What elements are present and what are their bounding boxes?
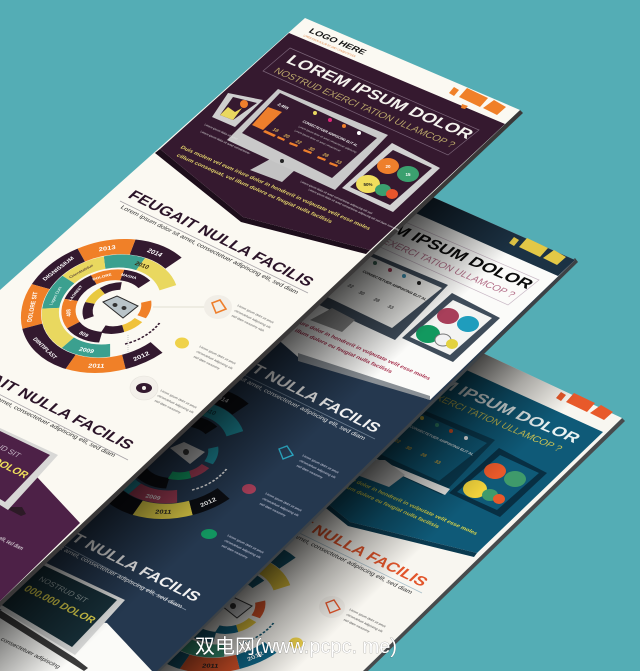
card 2 title frame (323, 198, 539, 305)
heading subtitle: Lorem ipsum dolor sit amet, consectetuer adipiscing elit, sed diam (119, 205, 300, 296)
monitor screen (242, 93, 377, 178)
card 2 icon note: consectetuer adipiscing elit (298, 459, 337, 479)
lightbulb note: consectetuer adipiscing elit (195, 350, 234, 370)
card 3 monitor values (382, 432, 442, 466)
card 2 crimson paragraph: cillum consequat, vel illum dolore eu feugiat nulla facilisis (235, 303, 393, 375)
card 1: purple and cream poster (0, 18, 523, 607)
book note: consectetuer adipiscing elit (233, 309, 272, 329)
bar values: 20 (282, 133, 291, 140)
card 2 monitor values: 22 (346, 283, 355, 290)
icon: eye (130, 376, 158, 400)
card 3 monitor frame (334, 394, 495, 495)
card 2 eye note: consectetuer adipiscing elit (223, 539, 262, 559)
card 3 monitor values: 30 (404, 445, 413, 452)
eye note (153, 389, 198, 414)
card 2 heart note: sed diam nonummy (258, 502, 287, 517)
small captions: Lorem ipsum dolor sit amet consectetuer (199, 130, 251, 155)
tablet screen (350, 150, 432, 205)
card 3 dotted arc (161, 558, 301, 658)
book note: Lorem ipsum dolor sit amet (236, 304, 275, 324)
card 3 monitor values: 33 (433, 459, 442, 466)
donut centre icon (103, 296, 138, 318)
yellow paragraph: Duis molem vel eum iriure dolor in hendrerit in vulputate velit esse moles (179, 145, 371, 231)
card 2: navy and white poster (0, 165, 578, 671)
small captions (199, 123, 401, 232)
card 2 tablet circles (416, 308, 479, 349)
title frame (263, 48, 479, 155)
card 3 monitor heading: CONSECTETUER ADIPISCING ELIT AL (408, 425, 475, 457)
card 3 yellow paragraph: Duis molem vel eum iriure dolor in hendrerit in vulputate velit esse moles (286, 450, 478, 536)
logo: LOGO HERE (307, 26, 369, 56)
card 2 eye note (220, 534, 265, 559)
card 2 top band (343, 165, 575, 276)
card 2 legend (373, 261, 421, 285)
card 2 cast shadow on card 3 (150, 320, 622, 671)
card 3 donut chart (114, 526, 335, 671)
device icons (449, 87, 506, 115)
card 2 subtitle: NOSTRUD EXERCI TATION ULLAMCOP ? (331, 216, 518, 300)
card 3 book note (342, 608, 387, 633)
card 2 second rule (8, 516, 186, 610)
card 2 monitor values: 20 (335, 277, 344, 284)
card 3 inner arcs (190, 579, 272, 637)
laptop amount: 000.000 DOLOR (21, 584, 98, 626)
card 3 tablet screen (457, 455, 539, 510)
card 3 monitor values: 20 (382, 432, 391, 439)
card 3 monitor values: 28 (419, 452, 428, 459)
tablet values: 15 (405, 172, 411, 177)
donut chart: 408 (66, 308, 73, 317)
card 3 icon: book (319, 596, 345, 618)
connector line 2 (127, 335, 129, 352)
icon: book (204, 295, 232, 319)
laptop base (0, 505, 26, 516)
card 3 lower contents (114, 488, 431, 671)
card 3 donut centre icon (217, 596, 252, 618)
card 2 navy page (0, 165, 575, 671)
card 3: blue and cream poster (114, 320, 625, 671)
card 2 monitor heading: CONSECTETUER ADIPISCING ELIT AL (361, 270, 428, 302)
card 2 icon: book (279, 446, 293, 459)
card 2 donut chart: 2009 (144, 493, 162, 502)
card 2 donut chart: 2010 (200, 407, 218, 417)
card 2 title: LOREM IPSUM DOLOR (342, 203, 537, 292)
card 3 thickness edge (360, 418, 625, 671)
card 2 icon note (295, 454, 340, 479)
laptop frame (0, 428, 58, 510)
watermark: 双电网(www.pcpc. me) (195, 635, 397, 658)
card 3 top contents (282, 357, 613, 536)
card 3 donut chart: 2011 (201, 663, 219, 669)
donut chart: 2009 (77, 346, 96, 355)
laptop label: NOSTRUD SIT (37, 575, 90, 604)
card 2 icon: heart (242, 484, 256, 494)
card 2 lower contents (67, 334, 384, 559)
card 2 donut chart (67, 372, 288, 531)
card 3 yellow paragraph: cillum consequat, vel illum dolore eu feugiat nulla facilisis (282, 458, 440, 530)
donut chart: 2010 (133, 261, 151, 271)
card 3 legend (420, 416, 468, 440)
card 3 chevron fold (264, 454, 477, 557)
card 3 monitor stand (357, 460, 405, 487)
laptop screen (0, 565, 117, 647)
card 2 icon note: sed diam nonummy (295, 464, 324, 479)
card 3 heading subtitle: Lorem ipsum dolor sit amet, consectetuer adipiscing elit, sed diam (233, 505, 414, 596)
bar value: 2,455 (276, 102, 291, 110)
card 3 monitor bottom strip (347, 451, 450, 495)
donut chart: 2011 (87, 363, 105, 369)
donut chart: MAGNA (120, 272, 138, 280)
laptop base (0, 610, 88, 671)
card 2 heart note: Lorem ipsum dolor sit amet (264, 492, 303, 512)
card 2 fold (298, 353, 430, 400)
donut chart: 2012 (132, 351, 151, 363)
card 3 device icons (556, 392, 613, 420)
card 3 book note: Lorem ipsum dolor sit amet (348, 608, 387, 628)
donut chart: DOLORE (92, 272, 112, 281)
card 2 donut chart: 2012 (199, 497, 218, 509)
lower purple section (0, 440, 80, 601)
monitor copy: Lorem ipsum dolor sit amet consectetuer adipiscing (297, 125, 358, 154)
donut chart: LAOREET (67, 284, 84, 301)
card 2 donut chart: 2011 (154, 509, 172, 515)
donut chart: Orientibitidue (68, 263, 95, 279)
monitor heading: CONSECTETUER ADIPISCING ELIT AL (301, 120, 359, 148)
tablet frame (342, 143, 440, 212)
phone (212, 93, 263, 127)
card 1 purple header (160, 33, 505, 250)
card 2 laptop (0, 560, 125, 671)
connector line (153, 306, 208, 308)
card 3 tablet circles (463, 463, 526, 504)
card 3 blue header (267, 338, 603, 553)
tablet values: 50% (363, 182, 373, 187)
eye note: sed diam nonummy (153, 399, 182, 414)
card 2 donut chart: 2014 (213, 394, 231, 405)
card 2 second heading: FEUGAIT NULLA FACILIS (11, 503, 204, 605)
bar values (271, 127, 343, 166)
card 2 heading rule (187, 347, 375, 439)
laptop (0, 428, 58, 516)
card 3 heading rule (234, 501, 422, 593)
card 2 heart note (258, 492, 303, 517)
small captions: Lorem ipsum dolor sit amet consectetuer adipiscing elit sed diam nonummy (307, 188, 401, 232)
card 2 second subtitle: Lorem ipsum dolor sit amet, consectetuer adipiscing elit, sed diam (3, 519, 184, 610)
donut chart: DIINTIPLAST (31, 337, 58, 361)
bar values: 22 (294, 139, 303, 146)
donut chart: 809 (77, 331, 89, 339)
card 2 inner arcs (143, 425, 225, 483)
bar values: 30 (307, 146, 316, 153)
tablet circles (356, 158, 419, 199)
laptop frame (0, 560, 125, 655)
card 3 book note: sed diam nonummy (342, 618, 371, 633)
inner arcs (76, 279, 158, 337)
title: LOREM IPSUM DOLOR (282, 53, 477, 142)
card 3 book note: consectetuer adipiscing elit (345, 613, 384, 633)
heading rule (120, 201, 308, 293)
card 2 dotted arc (114, 404, 254, 504)
donut chart: DIGNISSIUM (42, 256, 76, 282)
card 3 monitor screen (345, 398, 487, 481)
tablet (342, 143, 440, 212)
card 3 donut chart: 2012 (246, 651, 265, 663)
logo tagline: LOREM IPSUM DOLOR SIT AMET CONSECTETUER (302, 34, 357, 58)
icon: lightbulb (175, 338, 189, 348)
orange bar (252, 107, 282, 130)
card 2 white header (210, 165, 575, 400)
card 2 tablet screen (410, 300, 492, 355)
card 2 monitor values (335, 277, 395, 311)
card 3 monitor values: 22 (393, 438, 402, 445)
lightbulb note: sed diam nonummy (192, 355, 221, 370)
card 2 eye note: sed diam nonummy (220, 544, 249, 559)
tablet values (363, 164, 411, 187)
book note: sed diam nonummy nibh (230, 314, 266, 333)
small bars (263, 130, 338, 167)
donut chart: DOLORE SIT (27, 291, 40, 322)
card 2 heading: FEUGAIT NULLA FACILIS (191, 334, 384, 436)
small captions: Lorem ipsum dolor sit amet (203, 123, 239, 141)
card 2 heart note: consectetuer adipiscing elit (261, 497, 300, 517)
donut chart (0, 225, 221, 388)
card 3 icon: lightbulb (289, 638, 303, 648)
card 3 heading: FEUGAIT NULLA FACILIS (238, 488, 431, 590)
phone graph (220, 107, 242, 120)
lightbulb note (192, 345, 237, 370)
card 3 subtitle: NOSTRUD EXERCI TATION ULLAMCOP ? (378, 370, 565, 454)
card 1 cast shadow on card 2 (0, 165, 575, 671)
bar values: 33 (334, 159, 343, 166)
lightbulb note: Lorem ipsum dolor sit amet (198, 345, 237, 365)
card 3 cream page (150, 320, 622, 671)
laptop screen (0, 431, 50, 502)
phone frame (212, 93, 263, 127)
card 2 bottom white section (0, 610, 152, 671)
card 2 monitor frame (287, 239, 448, 340)
heading: FEUGAIT NULLA FACILIS (124, 188, 317, 290)
donut chart: 2013 (99, 245, 116, 253)
small captions: Lorem ipsum dolor sit amet consectetuer adipiscing elit sed (299, 180, 374, 215)
monitor stand (250, 158, 295, 182)
subtitle: NOSTRUD EXERCI TATION ULLAMCOP ? (271, 66, 458, 150)
monitor frame (227, 89, 388, 190)
card 2 monitor screen (298, 243, 442, 328)
donut chart: 2014 (145, 248, 164, 259)
monitor (227, 89, 388, 190)
book note (230, 304, 275, 333)
card 2 top contents (235, 198, 566, 381)
monitor dot (280, 159, 284, 163)
card 2 bottom caption: consectetuer adipiscing (0, 637, 62, 670)
bar values: 28 (321, 152, 330, 159)
card 3 donut chart: 2014 (260, 548, 278, 559)
card 2 tablet (402, 293, 500, 362)
phone screen (220, 97, 257, 120)
legend (313, 111, 361, 135)
monitor copy: Lorem ipsum dolor sit amet consectetuer (293, 129, 342, 152)
card 2 icon note: Lorem ipsum dolor sit amet (301, 454, 340, 474)
card 2 monitor values: 33 (386, 304, 395, 311)
second rule (0, 364, 128, 460)
eye note: Lorem ipsum dolor sit amet (159, 389, 198, 409)
card 2 crimson paragraph: Duis molem vel eum iriure dolor in hendrerit in vulputate velit esse moles (239, 295, 431, 381)
card 2 monitor stand (310, 308, 355, 332)
card 1 cream page (0, 18, 520, 601)
card 2 eye note: Lorem ipsum dolor sit amet (226, 534, 265, 554)
bar values: 18 (271, 127, 280, 134)
card 2 icon: eye (201, 529, 217, 539)
card 2 donut centre icon (170, 442, 205, 464)
card 1 thickness edge (0, 110, 523, 607)
card 2 device icons (509, 237, 566, 265)
card 2 monitor values: 28 (372, 297, 381, 304)
dotted arc (47, 258, 187, 358)
tablet values: 20 (385, 164, 391, 169)
card 3 donut chart: 2010 (247, 561, 265, 571)
donut chart: Lugeni Ours (48, 286, 63, 305)
card 3 tablet (449, 448, 547, 517)
card 1 chevron fold (155, 149, 370, 254)
card 2 monitor values: 30 (357, 290, 366, 297)
card 2 heading subtitle: Lorem ipsum dolor sit amet, consectetuer adipiscing elit, sed diam (186, 351, 367, 442)
phone badge (240, 100, 248, 108)
card 3 title: LOREM IPSUM DOLOR (389, 357, 584, 446)
card 2 thickness edge (150, 258, 578, 671)
eye note: consectetuer adipiscing elit (156, 394, 195, 414)
yellow paragraph: cillum consequat, vel illum dolore eu feugiat nulla facilisis (175, 153, 333, 225)
